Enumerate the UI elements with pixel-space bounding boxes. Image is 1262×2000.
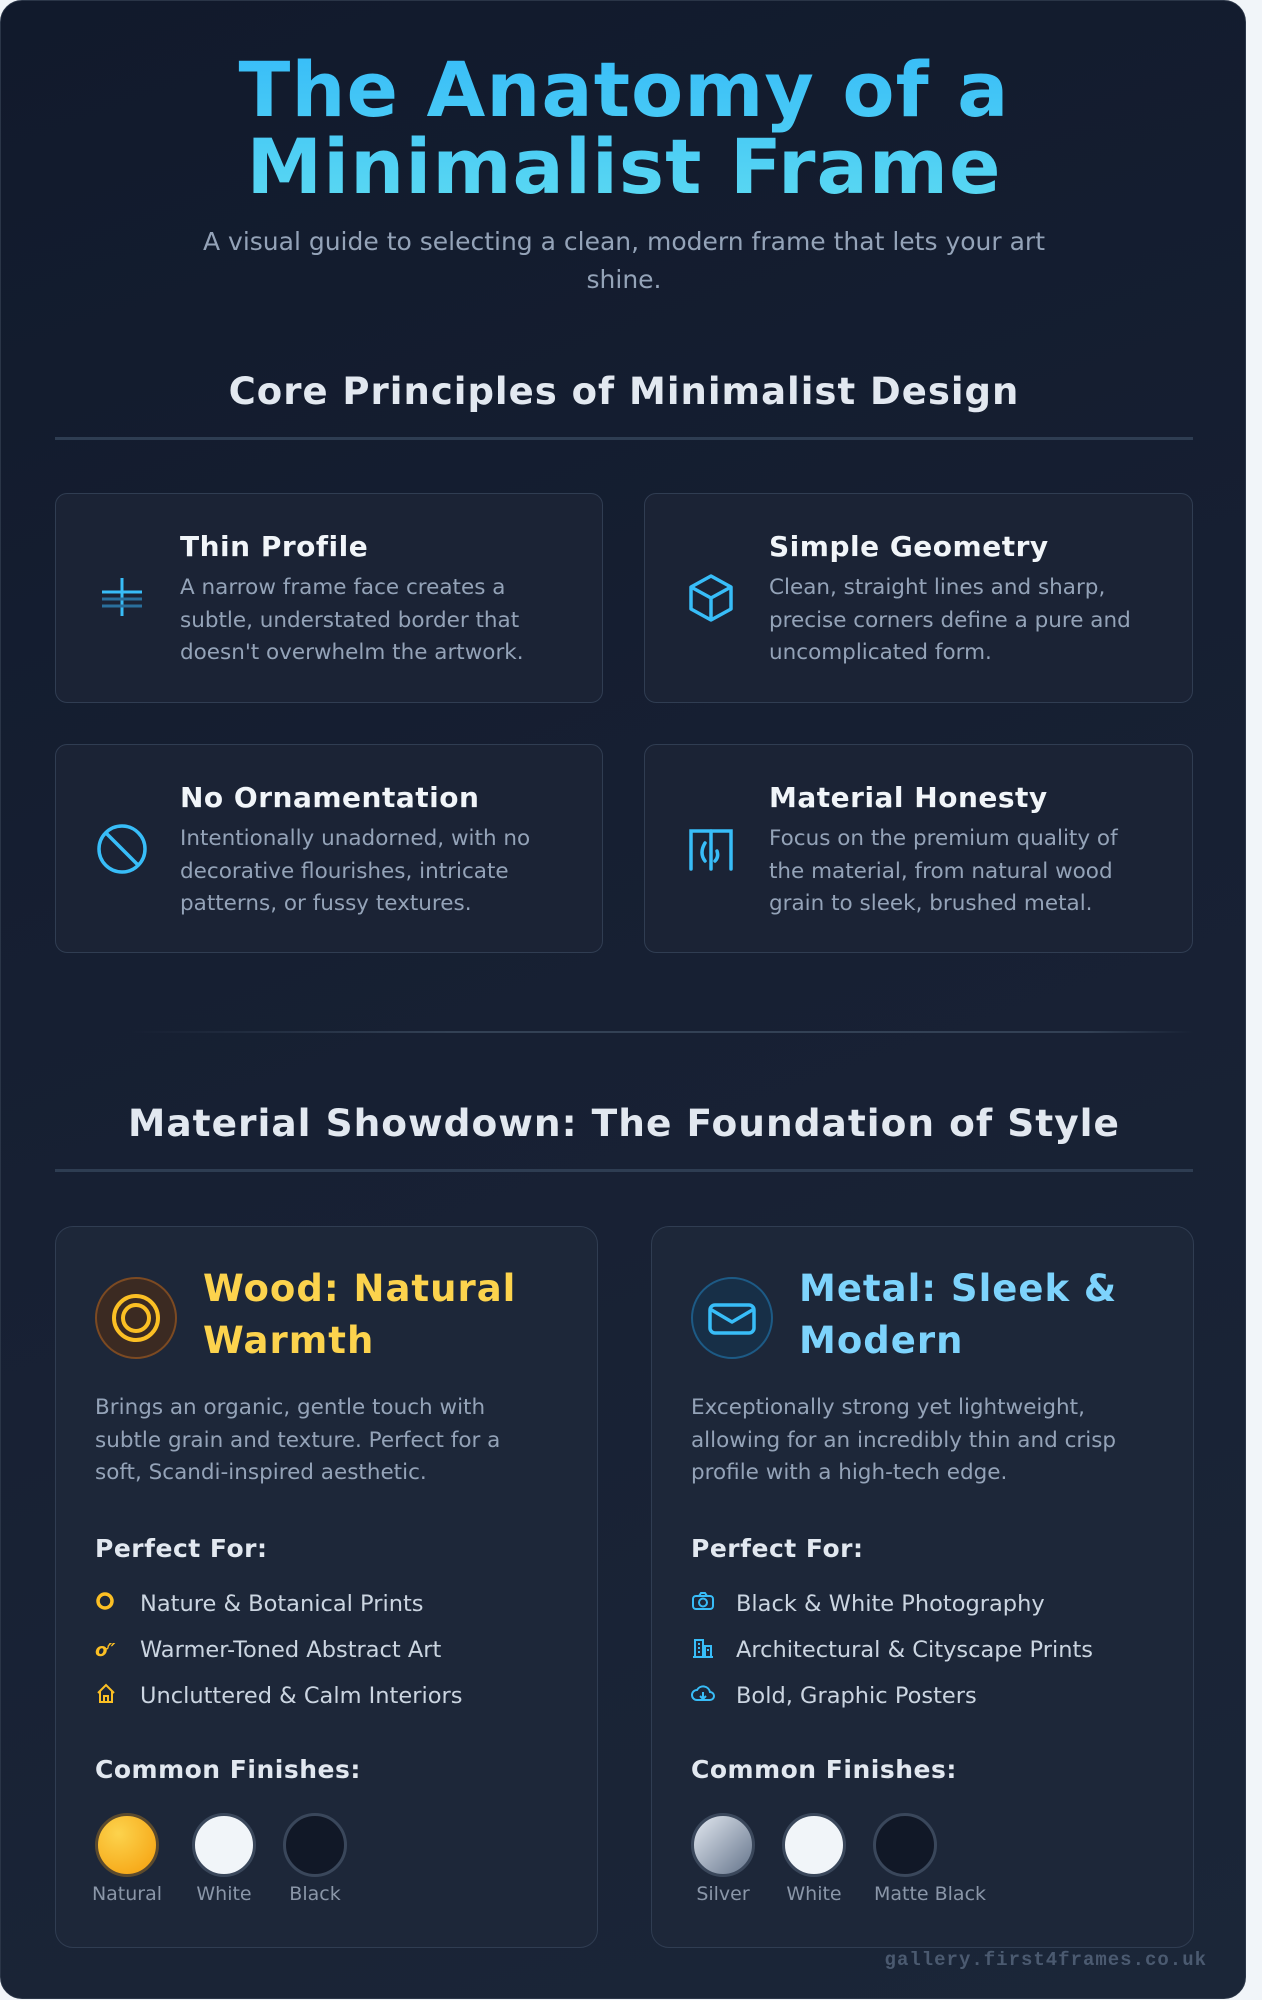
swatches: metal <box>691 1813 986 1905</box>
panel: metal: Metal: Sleek & <box>799 1267 1117 1310</box>
divider <box>131 1031 1193 1033</box>
card: no ornamentation <box>55 744 603 953</box>
panel: metal: Perfect For: <box>691 1534 863 1563</box>
footer url: gallery.first4frames.co.uk <box>885 1949 1207 1971</box>
list: metal uses: Black & White Photography <box>736 1591 1045 1617</box>
list: metal uses <box>691 1591 1093 1709</box>
icon: cube <box>689 574 733 622</box>
card: material honesty <box>644 744 1193 953</box>
panel: wood: Wood: Natural <box>203 1267 516 1310</box>
title <box>1 51 1247 205</box>
panel: wood: Black <box>289 1883 341 1905</box>
panel: metal <box>651 1226 1194 1948</box>
list: wood uses: ơ″ <box>95 1640 115 1660</box>
panel: wood: Brings an organic, gentle touch with subtle grain and texture. Perfect for a soft, Scandi-inspired aesthetic. <box>95 1395 500 1485</box>
card: thin profile: Thin Profile <box>180 530 368 563</box>
card: simple geometry: Clean, straight lines and sharp, precise corners define a pure and uncomplicated form. <box>769 575 1131 665</box>
card: no ornamentation: Intentionally unadorned, with no decorative flourishes, intricate patterns, or fussy textures. <box>180 826 530 916</box>
title: Minimalist Frame <box>246 122 1002 211</box>
panel: metal: Common Finishes: <box>691 1755 957 1784</box>
list: metal uses: Architectural & Cityscape Prints <box>736 1637 1093 1663</box>
panel: wood: White <box>196 1883 252 1905</box>
list: metal uses: Bold, Graphic Posters <box>736 1683 977 1709</box>
panel: metal: Matte Black <box>874 1883 986 1905</box>
list: wood uses: Uncluttered & Calm Interiors <box>140 1683 462 1709</box>
card: material honesty: Focus on the premium quality of the material, from natural wood grain to sleek, brushed metal. <box>769 826 1118 916</box>
panel: metal: Modern <box>799 1319 963 1362</box>
panel: wood: Warmth <box>203 1319 374 1362</box>
card: material honesty: Material Honesty <box>769 781 1048 814</box>
subtitle: A visual guide to selecting a clean, modern frame that lets your art shine. <box>203 227 1045 294</box>
swatches: wood <box>92 1813 347 1905</box>
panel: metal: White <box>786 1883 842 1905</box>
card: thin profile: A narrow frame face creates a subtle, understated border that doesn't overwhelm the artwork. <box>180 575 524 665</box>
panel: wood <box>55 1226 598 1948</box>
icon: material <box>689 829 733 871</box>
icon: prohibited <box>97 824 147 874</box>
heading: core principles: Core Principles of Minimalist Design <box>229 370 1019 413</box>
title: The Anatomy of a <box>239 45 1009 134</box>
card: simple geometry <box>644 493 1193 703</box>
panel: wood: Natural <box>92 1883 162 1905</box>
icon: wood rings <box>95 1277 177 1359</box>
icon: thin profile <box>102 578 142 616</box>
panel: wood: Common Finishes: <box>95 1755 361 1784</box>
panel: metal: Silver <box>696 1883 750 1905</box>
list: wood uses: Nature & Botanical Prints <box>140 1591 424 1617</box>
card: no ornamentation: No Ornamentation <box>180 781 479 814</box>
list: wood uses: Warmer-Toned Abstract Art <box>140 1637 441 1663</box>
card: thin profile <box>55 493 603 703</box>
list: wood uses <box>95 1591 462 1709</box>
heading: material showdown: Material Showdown: The Foundation of Style <box>128 1101 1120 1145</box>
card: simple geometry: Simple Geometry <box>769 530 1049 563</box>
icon: envelope <box>691 1277 773 1359</box>
panel: wood: Perfect For: <box>95 1534 267 1563</box>
panel: metal: Exceptionally strong yet lightweight, allowing for an incredibly thin and crisp profile with a high-tech edge. <box>691 1395 1116 1485</box>
